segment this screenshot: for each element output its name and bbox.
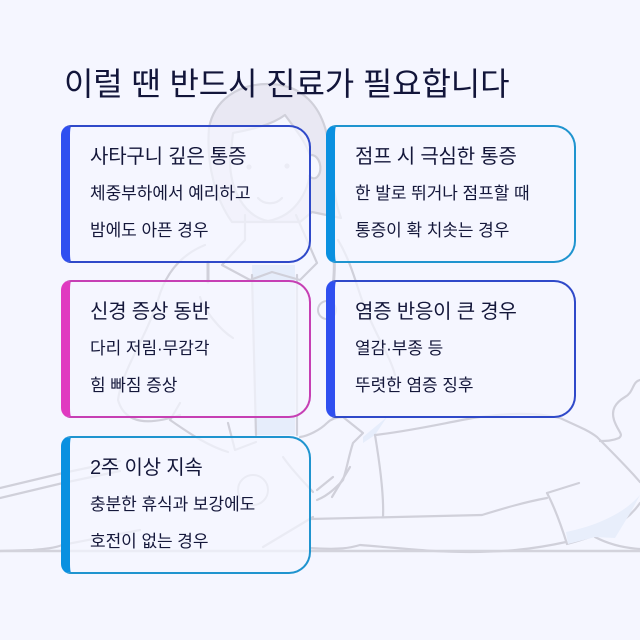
panel heading: 사타구니 깊은 통증 (90, 146, 246, 168)
doctor cuff (363, 417, 387, 443)
panel: lasting over two weeks (61, 436, 311, 574)
panel: severe pain on jumping (326, 125, 576, 263)
panel text line 1: 다리 저림·무감각 (90, 339, 209, 358)
doctor ear (309, 155, 320, 178)
panel text line 1: 한 발로 뛰거나 점프할 때 (355, 184, 530, 203)
panel text line 1: 체중부하에서 예리하고 (90, 184, 251, 203)
patient body and arm (310, 414, 640, 552)
patient legs, left (0, 461, 313, 551)
panel heading: 신경 증상 동반 (90, 301, 210, 323)
floor line (0, 550, 640, 552)
panel: neurological symptoms (61, 280, 311, 418)
panel heading: 염증 반응이 큰 경우 (355, 301, 517, 323)
patient foot (600, 380, 640, 441)
panel heading: 2주 이상 지속 (90, 457, 203, 479)
panel text line 1: 열감·부종 등 (355, 339, 443, 358)
doctor hair (208, 84, 341, 222)
patient sleeve shading (566, 495, 640, 544)
panel text line 1: 충분한 휴식과 보강에도 (90, 495, 255, 514)
panel text line 2: 통증이 확 치솟는 경우 (355, 221, 509, 240)
panel text line 2: 뚜렷한 염증 징후 (355, 376, 473, 395)
doctor face (230, 115, 311, 221)
panel text line 2: 호전이 없는 경우 (90, 532, 208, 551)
panel text line 2: 힘 빠짐 증상 (90, 376, 177, 395)
panel text line 2: 밤에도 아픈 경우 (90, 221, 208, 240)
panel: deep groin pain (61, 125, 311, 263)
title: 이럴 땐 반드시 진료가 필요합니다 (64, 66, 509, 102)
doctor hands (238, 417, 363, 505)
doctor coat (118, 215, 395, 452)
doctor facial features (246, 163, 290, 203)
panel: strong inflammation (326, 280, 576, 418)
doctor shirt band (252, 265, 295, 435)
panel heading: 점프 시 극심한 통증 (355, 146, 517, 168)
